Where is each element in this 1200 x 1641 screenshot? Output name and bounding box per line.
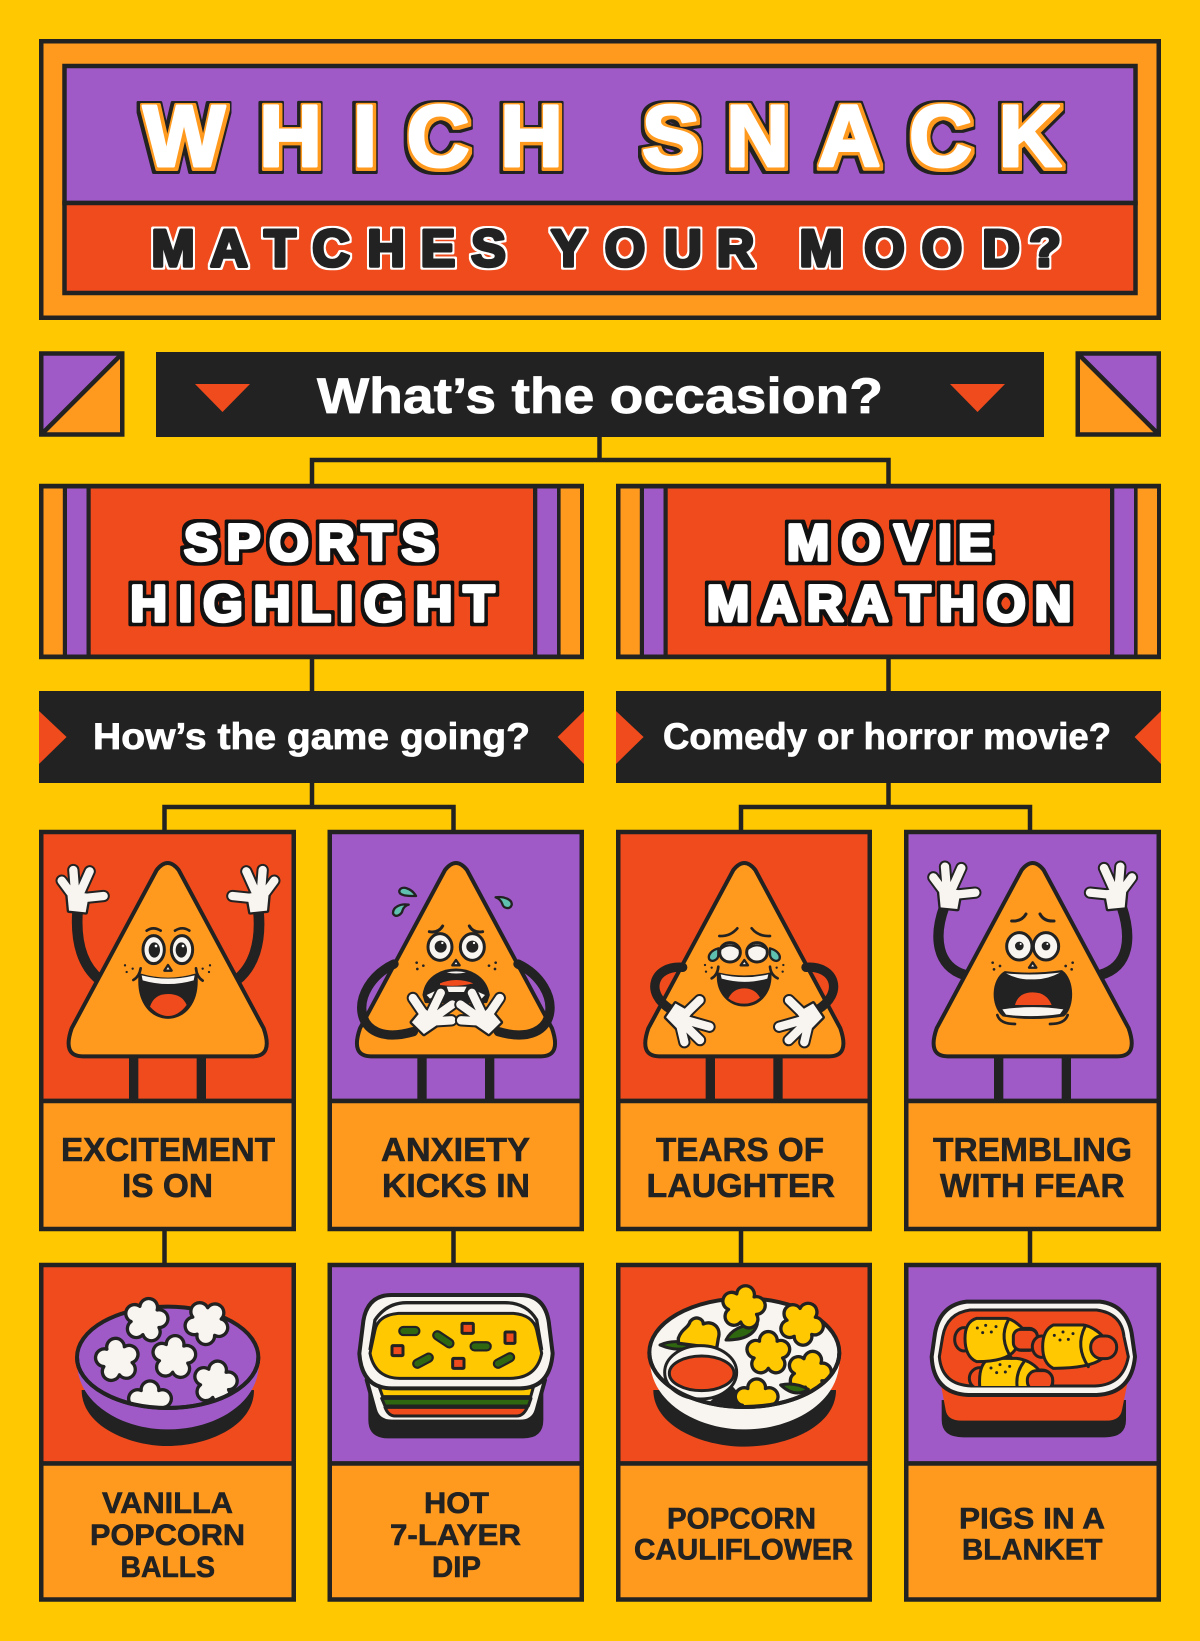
caption: excitement is on: IS ON <box>122 1168 213 1205</box>
panel: fear character <box>906 832 1159 1101</box>
caption: popcorn cauliflower: POPCORN <box>667 1502 816 1536</box>
caption: hot 7-layer dip: HOT <box>424 1487 489 1520</box>
panel: sports highlight <box>41 486 582 657</box>
caption: popcorn cauliflower <box>618 1464 870 1600</box>
caption: hot 7-layer dip: DIP <box>432 1551 481 1584</box>
heading: sports highlight: HIGHLIGHT <box>130 575 495 632</box>
caption: hot 7-layer dip: 7-LAYER <box>390 1519 521 1552</box>
heading: matches your mood: MATCHES YOUR MOOD? <box>151 220 1061 278</box>
panel: excitement character <box>41 832 294 1101</box>
caption: anxiety kicks in <box>330 1101 582 1229</box>
panel: movie marathon <box>618 486 1159 657</box>
caption: popcorn cauliflower: CAULIFLOWER <box>634 1534 853 1566</box>
question banner: movie <box>616 691 1161 783</box>
caption: excitement is on: EXCITEMENT <box>61 1132 276 1169</box>
heading: movie marathon: MARATHON <box>707 575 1071 632</box>
decorative corner square left <box>41 354 122 434</box>
question banner: game <box>39 691 584 783</box>
caption: vanilla popcorn balls <box>41 1464 294 1600</box>
caption: trembling with fear <box>906 1101 1159 1229</box>
caption: pigs in a blanket: PIGS IN A <box>959 1502 1105 1536</box>
panel: vanilla popcorn balls image <box>41 1265 294 1464</box>
icon: dip tray <box>359 1295 553 1438</box>
panel: laughter character <box>618 832 870 1101</box>
caption: pigs in a blanket: BLANKET <box>962 1534 1102 1566</box>
connectors <box>164 437 1030 1263</box>
decorative corner square right <box>1078 354 1159 434</box>
icon: excited chip <box>62 863 274 1099</box>
heading: sports highlight: SPORTS <box>184 514 436 571</box>
caption: tears of laughter: TEARS OF <box>656 1132 824 1169</box>
panel: pigs in a blanket image <box>906 1265 1159 1464</box>
icon: pigs in a blanket tray <box>932 1302 1135 1437</box>
caption: trembling with fear: WITH FEAR <box>940 1168 1124 1205</box>
icon: popcorn bowl <box>77 1292 259 1446</box>
icon: right marker <box>950 384 1005 412</box>
question banner: occasion <box>156 352 1044 437</box>
caption: vanilla popcorn balls: POPCORN <box>90 1519 245 1552</box>
question text: Comedy or horror movie? <box>663 716 1111 757</box>
icon: left marker <box>195 384 250 412</box>
icon: anxious chip <box>357 863 555 1099</box>
caption: excitement is on <box>41 1101 294 1229</box>
question text: How’s the game going? <box>93 716 530 757</box>
caption: anxiety kicks in: ANXIETY <box>381 1132 530 1169</box>
title panel <box>41 41 1159 318</box>
panel: popcorn cauliflower image <box>618 1265 870 1464</box>
roll 1 <box>953 1326 966 1352</box>
roll 3 <box>968 1366 981 1386</box>
dip bowl <box>665 1346 737 1399</box>
icon: cauliflower bowl <box>649 1282 839 1447</box>
heading: movie marathon: MOVIE <box>787 514 992 571</box>
icon: laughing chip <box>645 863 843 1099</box>
caption: tears of laughter <box>618 1101 870 1229</box>
caption: anxiety kicks in: KICKS IN <box>382 1168 530 1205</box>
panel: anxiety character <box>330 832 582 1101</box>
caption: tears of laughter: LAUGHTER <box>646 1168 835 1205</box>
panel: hot 7-layer dip image <box>330 1265 582 1464</box>
caption: hot 7-layer dip <box>330 1464 582 1600</box>
roll 2 <box>1030 1334 1043 1359</box>
caption: pigs in a blanket <box>906 1464 1159 1600</box>
icon: scared chip <box>933 863 1132 1099</box>
caption: trembling with fear: TREMBLING <box>933 1132 1132 1169</box>
caption: vanilla popcorn balls: BALLS <box>120 1551 215 1584</box>
question text: What’s the occasion? <box>317 368 883 424</box>
caption: vanilla popcorn balls: VANILLA <box>102 1487 233 1520</box>
heading: which snack: WHICH SNACK <box>143 88 1062 185</box>
